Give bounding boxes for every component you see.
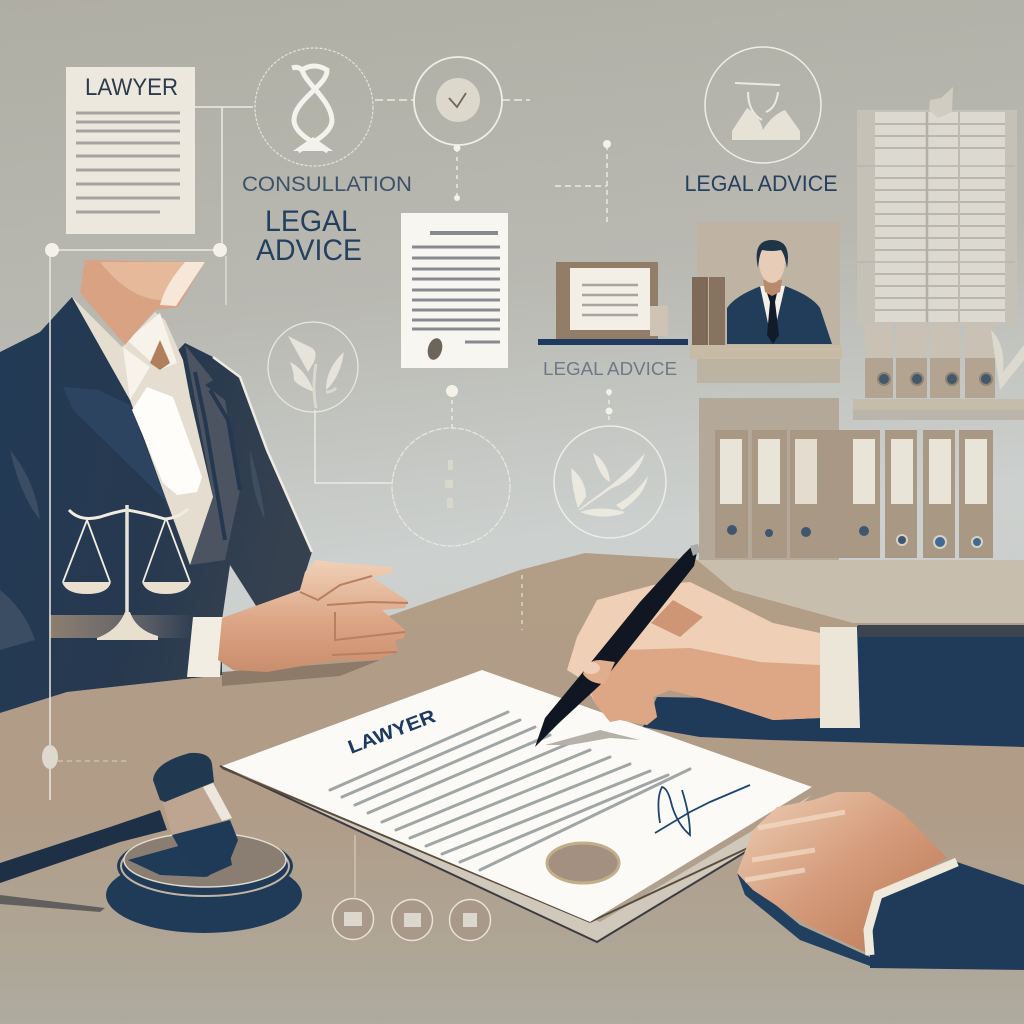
- document: centre sheet: [401, 213, 508, 368]
- left shelf with framed document: [538, 262, 842, 359]
- gavel head: [153, 753, 214, 802]
- resting hand: [737, 792, 1024, 970]
- panel: seated lawyer: [0, 260, 408, 713]
- shirt: [72, 297, 213, 565]
- clasped hands: [218, 560, 408, 672]
- icon: open book circle: [705, 47, 821, 163]
- jacket sleeve highlight: [213, 357, 312, 552]
- jacket: [0, 297, 312, 713]
- head shadow: [128, 845, 232, 877]
- upper right shelf with small binders: [853, 325, 1024, 420]
- heading: legal advice right: LEGAL ADVICE: [684, 171, 838, 196]
- lower binders row: [715, 430, 993, 558]
- icon: scales of justice: [62, 505, 191, 640]
- icon: check seal circle: [414, 57, 502, 145]
- gavel shadow: [0, 895, 105, 912]
- paper edge: [220, 766, 812, 942]
- wax seal: [547, 843, 619, 883]
- jacket cuff: [870, 862, 1024, 970]
- flow connectors: [52, 100, 609, 483]
- heading: consultation: CONSULLATION: [242, 173, 412, 196]
- jacket grey lapel: [185, 345, 240, 565]
- sleeve cuff: [187, 617, 223, 677]
- table: [0, 553, 1024, 1024]
- hand shadow: [737, 873, 870, 966]
- handle: [0, 810, 167, 883]
- hand: [567, 582, 820, 725]
- document: lawyer card: [66, 67, 195, 234]
- desk shadow band: [50, 615, 200, 638]
- window blinds: [857, 87, 1017, 325]
- heading: legal advice: ADVICE: [256, 234, 362, 267]
- signature: [655, 785, 750, 835]
- icon: plant circle: [268, 322, 358, 412]
- panel: office shelves: [538, 87, 1024, 563]
- neck: [80, 260, 205, 345]
- icon: dotted circle: [392, 428, 510, 546]
- thumb tip: [583, 660, 615, 684]
- contract heading: LAWYER: [345, 706, 439, 759]
- connector nodes: [213, 140, 612, 414]
- vertical timeline connector: [42, 243, 130, 800]
- shirt cuff: [820, 627, 860, 728]
- signing table connector: [521, 575, 523, 630]
- paper shadow: [545, 730, 640, 745]
- card heading: LAWYER: [85, 74, 178, 101]
- shelf back panel: [699, 398, 839, 563]
- portrait of lawyer on shelf: [697, 222, 840, 383]
- heading: legal advice: [256, 205, 362, 267]
- jacket sleeve: [643, 625, 1024, 747]
- main contract document: [220, 670, 812, 942]
- panel: signing hand: [535, 544, 1024, 747]
- label: legal advice shelf: LEGAL ADVICE: [543, 359, 677, 379]
- icon: leaves circle: [554, 426, 666, 538]
- heading: legal advice: LEGAL: [265, 205, 357, 238]
- gavel: [0, 753, 302, 933]
- under-arm shadow: [222, 660, 380, 686]
- pen: [535, 548, 698, 747]
- contract text lines: [330, 712, 690, 870]
- sound block: [106, 857, 302, 933]
- back shelf ledge: [697, 560, 1024, 623]
- icon: caduceus circle: [255, 48, 373, 166]
- small icon row: [332, 835, 490, 940]
